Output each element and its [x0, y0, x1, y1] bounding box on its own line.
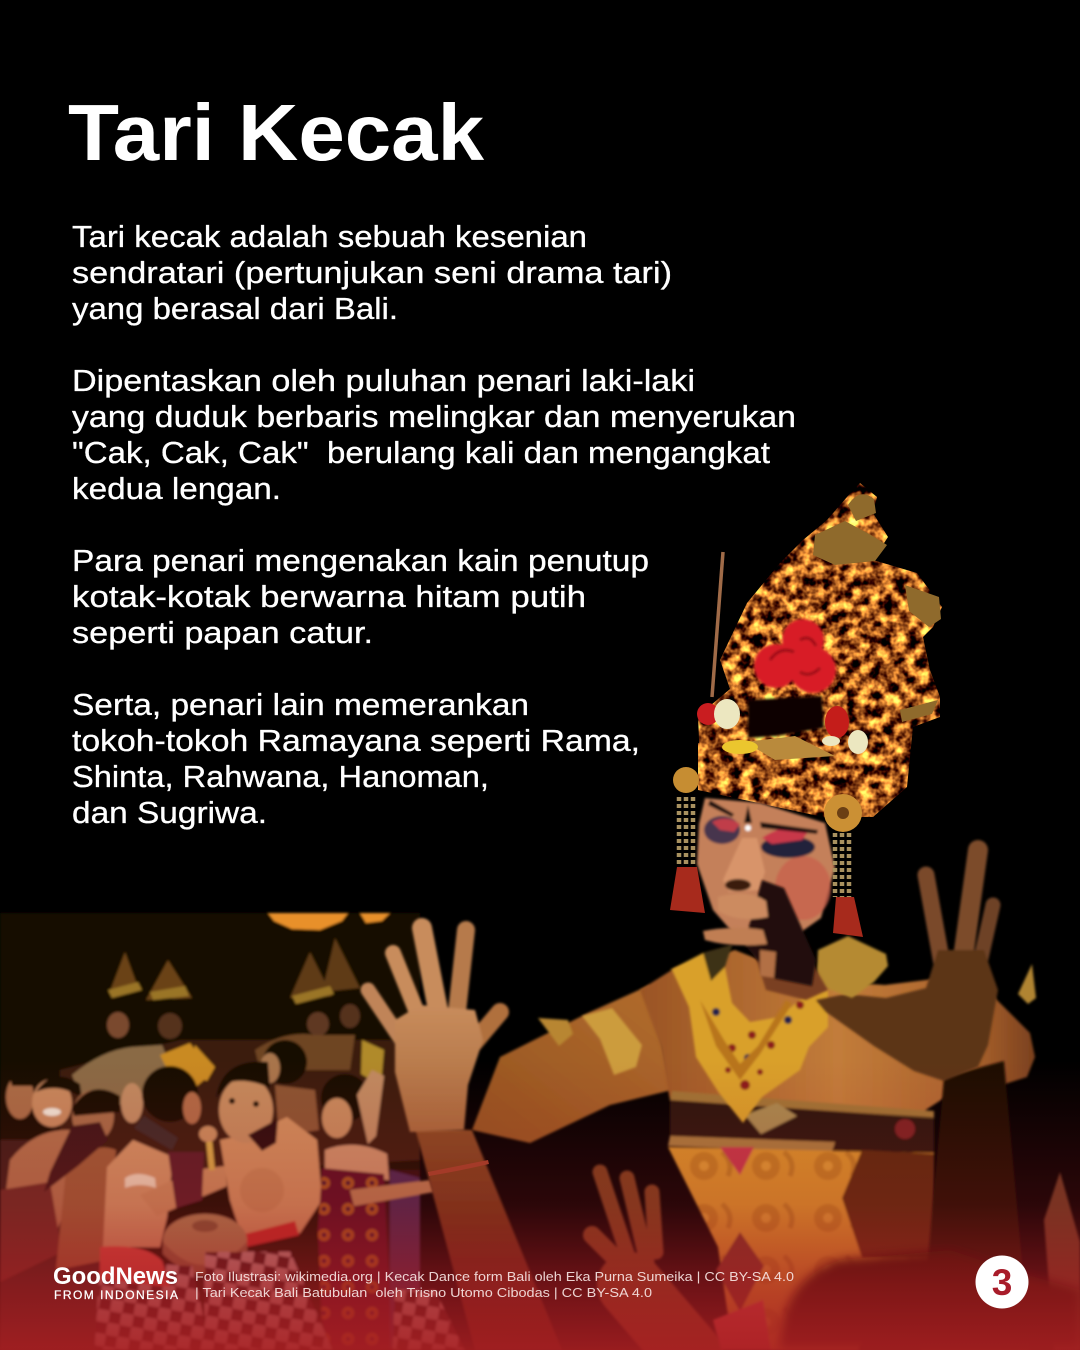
paragraph 1 [72, 219, 672, 326]
stage fire [268, 913, 390, 930]
paragraph 1: yang berasal dari Bali. [72, 291, 398, 326]
paragraph 1: sendratari (pertunjukan seni drama tari) [72, 255, 672, 290]
sarong [668, 1147, 934, 1350]
paragraph 4: tokoh-tokoh Ramayana seperti Rama, [72, 723, 640, 758]
paragraph 2: "Cak, Cak, Cak" berulang kali dan mengangkat [72, 435, 770, 470]
paragraph 3: Para penari mengenakan kain penutup [72, 543, 649, 578]
gold leaf highlights [813, 494, 941, 722]
right raised hand [816, 850, 998, 1081]
photo: lead dancer [368, 483, 1080, 1350]
page number badge [976, 1256, 1028, 1308]
paragraph 3: kotak-kotak berwarna hitam putih [72, 579, 586, 614]
ear discs [673, 767, 699, 793]
headband [698, 730, 907, 817]
photo credits: | Tari Kecak Bali Batubulan oleh Trisno Utomo Cibodas | CC BY-SA 4.0 [195, 1285, 652, 1300]
armband [582, 1008, 642, 1075]
shadowed right arm [920, 1061, 1030, 1350]
performer front view [216, 1062, 322, 1240]
paragraph 2 [72, 363, 796, 506]
incense stick [712, 552, 723, 697]
upper arm [472, 985, 672, 1143]
face [697, 798, 835, 946]
left forearm [415, 1128, 562, 1350]
photo credits [195, 1269, 794, 1300]
logo: GoodNews from Indonesia: GoodNews [53, 1263, 178, 1290]
paragraph 1: Tari kecak adalah sebuah kesenian [72, 219, 587, 254]
logo: GoodNews from Indonesia: FROM INDONESIA [54, 1288, 178, 1302]
lower background hands [592, 1172, 690, 1350]
shadow figures at bottom [780, 1250, 1080, 1350]
bracelet [816, 936, 888, 998]
body text [72, 219, 796, 830]
necklace [670, 945, 828, 1123]
title: Tari Kecak [68, 88, 485, 177]
red rose [754, 619, 836, 693]
hand at mouth [703, 880, 816, 986]
red gradient overlay [0, 1060, 1080, 1350]
middle band of shadowed figures [60, 1040, 420, 1180]
torso [538, 950, 1036, 1350]
paragraph 2: kedua lengan. [72, 471, 281, 506]
logo: GoodNews from Indonesia [53, 1263, 178, 1302]
paragraph 3 [72, 543, 649, 650]
left raised hand [368, 928, 500, 1132]
crown shadow [748, 696, 824, 738]
paragraph 2: Dipentaskan oleh puluhan penari laki-laki [72, 363, 695, 398]
neck [752, 945, 828, 1000]
page number badge: 3 [992, 1262, 1012, 1303]
performer in back view [103, 1066, 227, 1247]
gong [163, 1214, 247, 1275]
paragraph 3: seperti papan catur. [72, 615, 373, 650]
paragraph 4: dan Sugriwa. [72, 795, 267, 830]
gem on band [745, 1103, 797, 1134]
man behind front row [260, 1040, 319, 1136]
paragraph 2: yang duduk berbaris melingkar dan menyerukan [72, 399, 796, 434]
back ornament [538, 1018, 573, 1046]
paragraph 4 [72, 687, 640, 830]
tassels [670, 797, 863, 937]
front row performers [0, 1040, 465, 1350]
paragraph 4: Shinta, Rahwana, Hanoman, [72, 759, 489, 794]
checked sarongs [95, 1262, 210, 1350]
small flowers [697, 703, 719, 725]
photo credits: Foto Ilustrasi: wikimedia.org | Kecak Dance form Bali oleh Eka Purna Sumeika | CC BY-SA 4.0 [195, 1269, 794, 1284]
back row dancers [72, 938, 366, 1105]
dancer in batik [318, 1040, 434, 1350]
paragraph 4: Serta, penari lain memerankan [72, 687, 529, 722]
crown [697, 483, 942, 817]
photo: kecak crowd [0, 913, 465, 1350]
waist band [670, 1097, 934, 1153]
